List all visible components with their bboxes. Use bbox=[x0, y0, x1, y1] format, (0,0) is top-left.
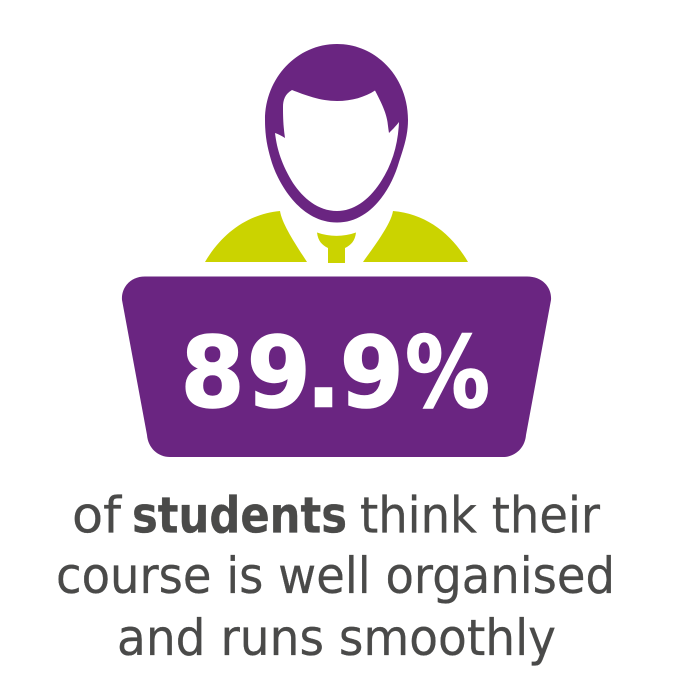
caption word: of: of bbox=[72, 486, 122, 544]
caption line 1 bbox=[72, 486, 600, 544]
caption bbox=[56, 486, 615, 667]
caption line 3: and runs smoothly bbox=[117, 609, 556, 667]
icon: right shoulder bbox=[363, 211, 468, 262]
icon: left shoulder bbox=[205, 211, 307, 262]
icon: student at laptop bbox=[205, 44, 468, 263]
statistic percent sign: % bbox=[405, 316, 490, 430]
laptop panel bbox=[122, 276, 551, 457]
caption line 2: course is well organised bbox=[56, 547, 615, 605]
icon: tie bbox=[317, 232, 356, 263]
caption word: students: students bbox=[132, 486, 347, 544]
caption words: think their: think their bbox=[360, 486, 600, 544]
icon: head with hair bbox=[265, 44, 408, 222]
statistic: 89.9% bbox=[180, 316, 490, 430]
statistic digits: 89.9 bbox=[180, 317, 404, 430]
